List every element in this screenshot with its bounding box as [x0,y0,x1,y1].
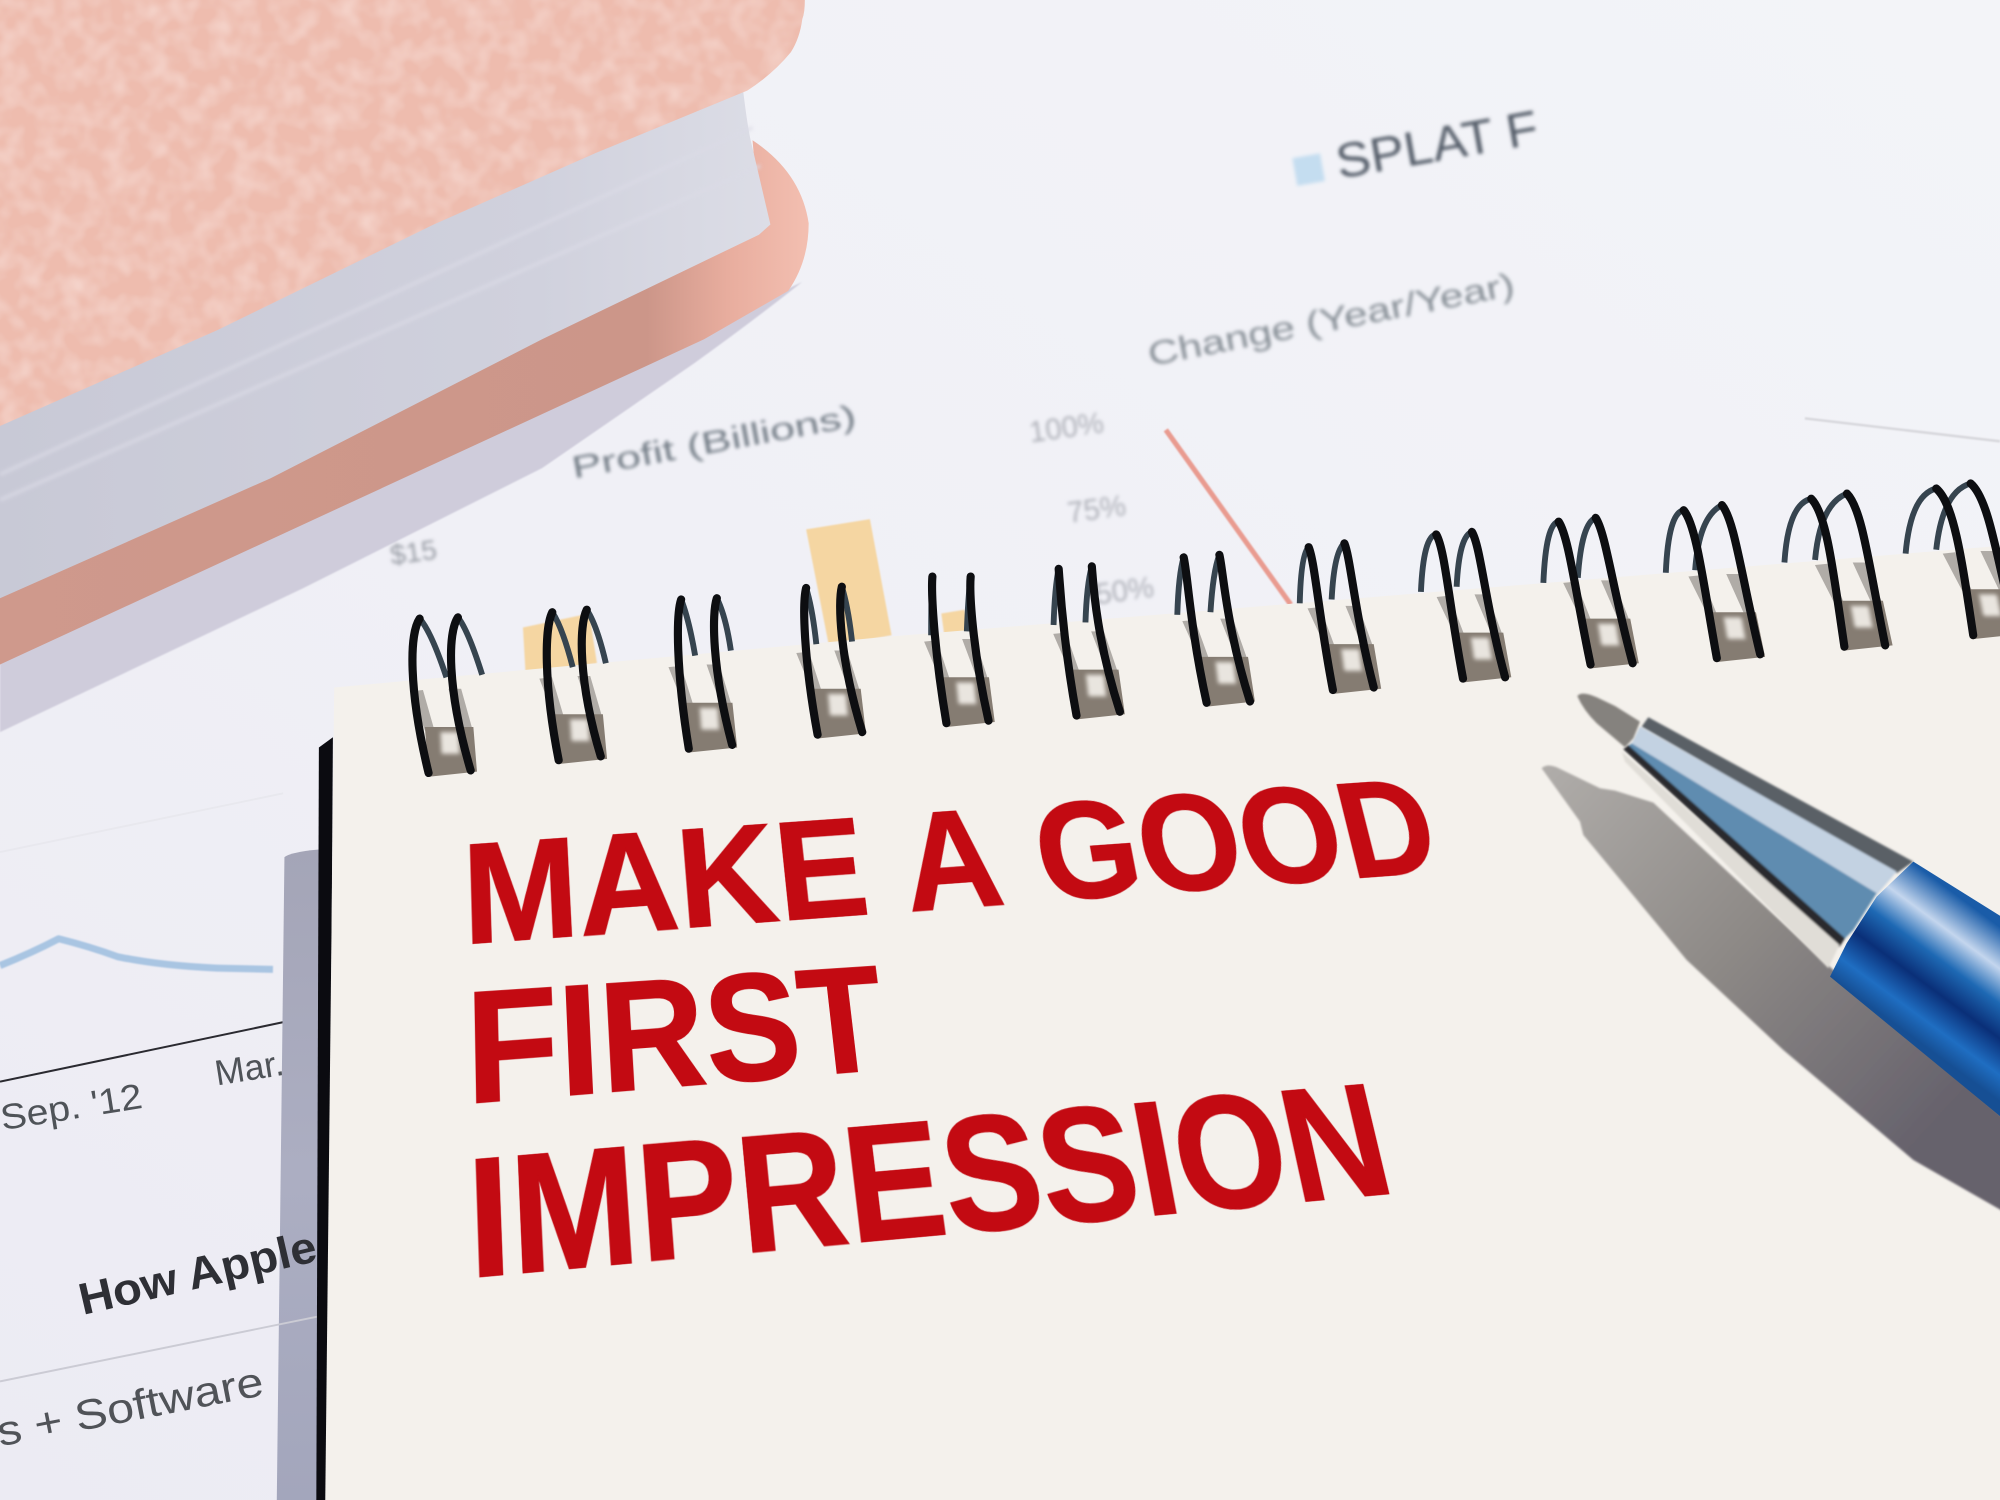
legend: SPLAT F: SPLAT F [1332,101,1542,189]
pen blue barrel [1830,862,2000,1122]
pen shadow [1542,766,2000,1213]
heading: How Apple: How Apple [74,1223,321,1325]
pen metal cone [1622,717,1913,968]
axis label: Mar.: Mar. [212,1043,287,1093]
lower left document [0,793,321,1500]
ballpoint pen with shadow [1542,694,2000,1213]
ring back strands [420,483,1971,677]
title line 3: IMPRESSION [465,1052,1407,1316]
blurred chart on document [388,101,2000,672]
book shadow on paper [0,282,802,732]
change trend line [1166,430,1291,605]
chart axis [0,1022,286,1082]
axis value: $15: $15 [388,534,439,571]
spiral binding rings [410,483,2000,777]
title: MAKE A GOOD FIRST IMPRESSION [461,752,1453,1316]
ring hole shadows [410,551,2000,777]
notebook page block [0,84,770,598]
axis label: Sep. '12: Sep. '12 [0,1076,145,1138]
pen tip [1577,694,1640,747]
label: Profit (Billions): Profit (Billions) [569,397,859,485]
axis value: 50%: 50% [1093,571,1156,612]
title line 1: MAKE A GOOD [461,752,1453,976]
label: Change (Year/Year): Change (Year/Year) [1145,267,1518,374]
notebook back edge [316,737,333,1500]
title line 2: FIRST [464,936,894,1140]
axis value: 75%: 75% [1065,489,1128,530]
shadow strip beside notebook [277,849,319,1500]
notebook lower cover [0,140,809,665]
axis value: 100%: 100% [1027,406,1106,450]
pink notebook [0,0,809,665]
blue line chart [0,939,273,969]
notebook paper [325,546,2000,1500]
ring front strands [412,483,2000,773]
notebook upper leather cover [0,0,805,426]
profit bars [523,519,972,672]
spiral notebook page [316,546,2000,1500]
